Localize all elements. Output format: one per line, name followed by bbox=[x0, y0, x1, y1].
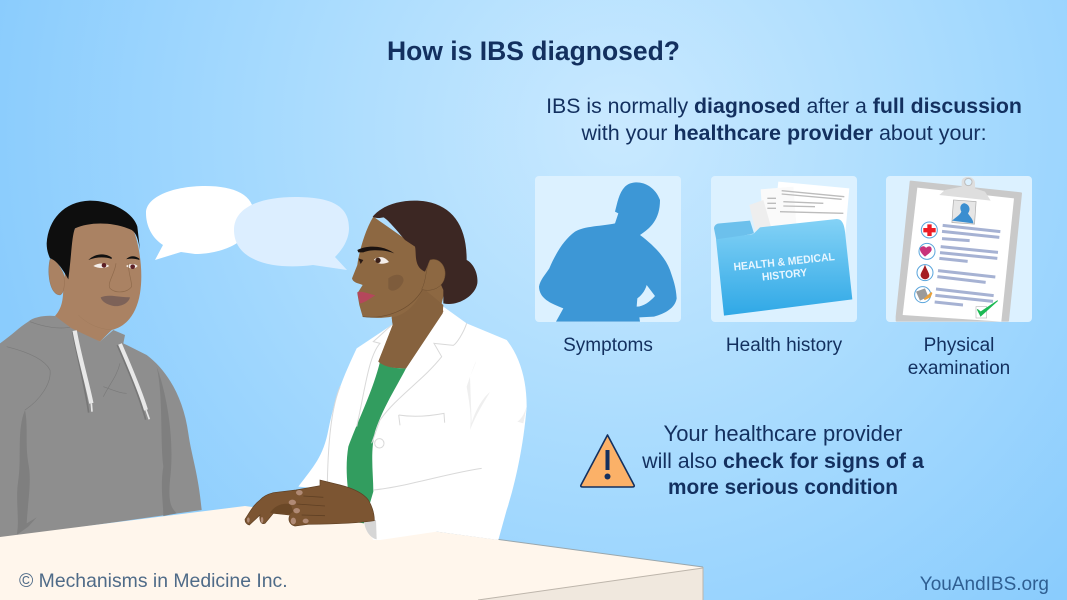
hair and bun bbox=[373, 201, 477, 304]
panel: health history bbox=[711, 176, 857, 322]
shirt bbox=[347, 362, 406, 523]
icon: clipboard bbox=[897, 177, 1021, 322]
panel: symptoms bbox=[535, 176, 681, 322]
label: health history: Health history bbox=[726, 335, 843, 356]
copyright: © Mechanisms in Medicine Inc. bbox=[19, 570, 288, 592]
eyes and brows bbox=[88, 254, 139, 269]
hoodie shadows bbox=[17, 367, 177, 535]
speech bubble: patient bbox=[146, 186, 254, 260]
hair bbox=[47, 201, 140, 279]
patient figure bbox=[0, 201, 202, 538]
hoodie bbox=[0, 316, 202, 538]
face bbox=[55, 222, 141, 342]
ear bbox=[422, 259, 445, 290]
warning text: more serious condition bbox=[668, 476, 898, 499]
neck and face bbox=[352, 217, 447, 368]
provider figure bbox=[298, 201, 527, 540]
hands bbox=[245, 480, 374, 526]
warning text: will also check for signs of a bbox=[642, 449, 924, 473]
icon: folder with documents: HEALTH & MEDICAL bbox=[733, 251, 836, 274]
speech bubble: provider bbox=[234, 197, 349, 270]
lips bbox=[357, 292, 375, 303]
icon: folder with documents bbox=[714, 182, 852, 316]
intro text: IBS is normally diagnosed after a full discussion bbox=[546, 94, 1022, 118]
icon: warning triangle bbox=[581, 435, 634, 487]
label: physical examination: examination bbox=[908, 358, 1010, 379]
coat details bbox=[327, 323, 482, 490]
ear bbox=[49, 259, 64, 295]
table bbox=[0, 506, 703, 600]
eye and brow bbox=[357, 247, 394, 264]
panel: physical examination bbox=[886, 176, 1032, 322]
intro text: with your healthcare provider about your: bbox=[581, 121, 987, 145]
nose and mouth bbox=[101, 263, 132, 306]
icon: person silhouette bbox=[539, 182, 677, 322]
label: symptoms: Symptoms bbox=[563, 335, 653, 356]
icon: folder with documents: HISTORY bbox=[761, 267, 808, 284]
lab coat bbox=[298, 307, 527, 540]
label: physical examination: Physical bbox=[924, 335, 994, 356]
title: How is IBS diagnosed? bbox=[387, 36, 680, 66]
drawstrings bbox=[73, 331, 149, 420]
website: YouAndIBS.org bbox=[920, 574, 1049, 595]
warning text: Your healthcare provider bbox=[664, 421, 902, 446]
